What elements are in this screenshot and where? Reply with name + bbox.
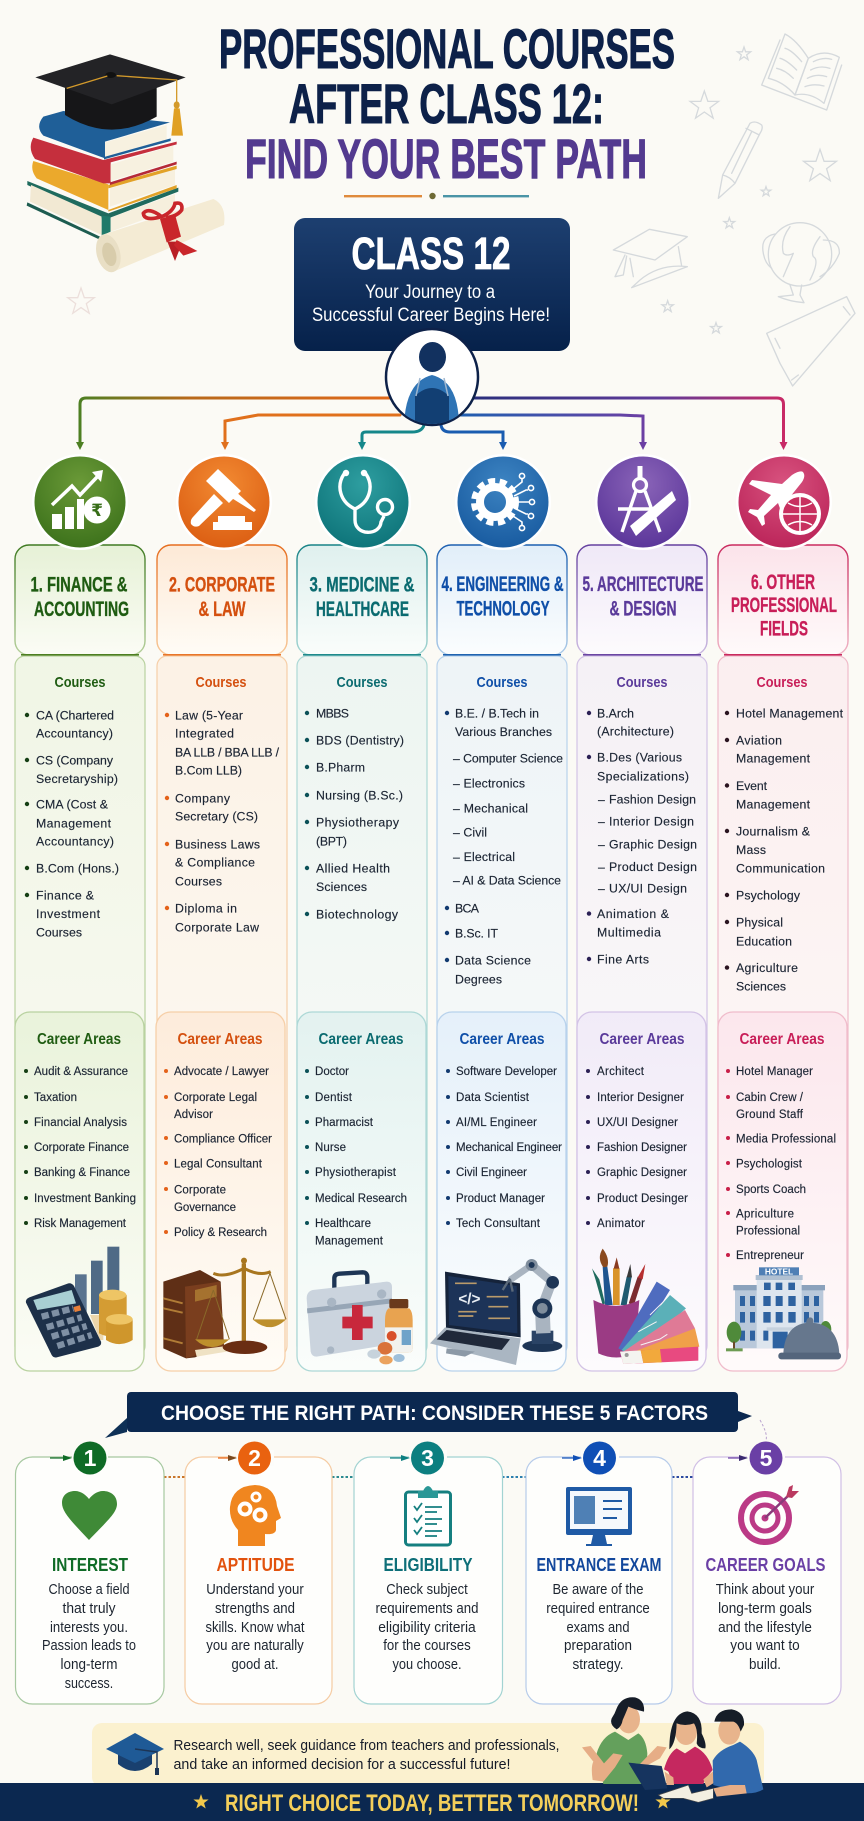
courses panel: Courses	[616, 674, 668, 691]
factor text: interests you.	[50, 1619, 128, 1636]
courses panel: Courses	[476, 674, 528, 691]
factor text: Understand your	[206, 1581, 304, 1598]
courses panel: – Civil	[453, 826, 487, 840]
advice text: Research well, seek guidance from teachers and professionals,	[174, 1737, 560, 1754]
courses panel: Multimedia	[597, 926, 661, 940]
career areas panel	[718, 1012, 847, 1371]
courses panel: Fine Arts	[597, 952, 649, 966]
number badge	[390, 1442, 447, 1474]
panel: class 12 box: Successful Career Begins Here!	[312, 305, 550, 326]
book: red	[31, 138, 177, 185]
header card: & DESIGN	[610, 598, 676, 620]
courses panel	[157, 656, 287, 1356]
courses panel: Accountancy)	[36, 834, 114, 848]
career areas panel: Hotel Manager	[736, 1066, 813, 1078]
advice text: and take an informed decision for a successful future!	[174, 1756, 510, 1773]
courses panel: Agriculture	[736, 961, 798, 975]
panel: column 2 corporate and law	[156, 454, 287, 1371]
courses panel: BCA	[455, 902, 480, 916]
career areas panel: Risk Management	[34, 1218, 127, 1230]
courses panel: Journalism &	[736, 824, 811, 838]
factor text: long-term goals	[718, 1600, 812, 1617]
career areas panel: Corporate	[174, 1184, 226, 1196]
factor text: skills. Know what	[206, 1619, 305, 1636]
courses panel: Secretaryship)	[36, 772, 118, 786]
footer band	[0, 1783, 864, 1821]
courses panel: B.Des (Various	[597, 750, 682, 764]
globe doodle	[763, 223, 839, 303]
courses panel: BA LLB / BBA LLB /	[175, 746, 280, 760]
courses panel: CMA (Cost &	[36, 798, 109, 812]
number badge: 2	[248, 1445, 261, 1471]
courses panel: – Mechanical	[453, 802, 528, 816]
courses panel: MBBS	[316, 706, 349, 720]
courses panel: Degrees	[455, 972, 502, 986]
courses panel: Investment	[36, 907, 101, 921]
panel: factor 3 eligibility	[354, 1442, 502, 1704]
left star doodle	[68, 288, 94, 313]
factor text: preparation	[564, 1637, 632, 1654]
courses panel: Integrated	[175, 726, 234, 740]
title: FIND YOUR BEST PATH	[245, 127, 647, 190]
career areas panel	[437, 1012, 566, 1371]
career areas panel: Ground Staff	[736, 1109, 804, 1121]
courses panel: Various Branches	[455, 725, 552, 739]
courses panel: Sciences	[736, 980, 786, 994]
book: blue	[39, 111, 171, 159]
courses panel: Mass	[736, 843, 766, 857]
heading banner: five factors	[105, 1392, 752, 1438]
factor text: Check subject	[386, 1581, 468, 1598]
icon: gavel	[176, 454, 272, 550]
cap	[35, 54, 186, 136]
career areas panel: Civil Engineer	[456, 1167, 527, 1179]
courses panel: – Computer Science	[453, 752, 563, 766]
header card: 5. ARCHITECTURE	[582, 573, 704, 596]
career areas panel: Nurse	[315, 1142, 346, 1154]
number badge: 5	[760, 1445, 773, 1471]
career areas panel: Corporate Finance	[34, 1142, 129, 1154]
factor text	[546, 1581, 650, 1673]
header card: ACCOUNTING	[34, 598, 129, 621]
courses panel: Education	[736, 934, 792, 948]
career areas panel: Taxation	[34, 1092, 77, 1104]
courses panel: Management	[36, 816, 112, 830]
career areas panel: Product Manager	[456, 1193, 545, 1205]
career areas panel: Software Developer	[456, 1066, 557, 1078]
factor text: that truly	[62, 1600, 116, 1617]
factor title: ELIGIBILITY	[384, 1555, 472, 1575]
icon: head with gears	[230, 1485, 281, 1546]
illustration: graduation cap, book stack and diploma	[27, 54, 224, 275]
factor text	[716, 1581, 814, 1673]
factor text: strategy.	[572, 1656, 624, 1673]
factor text: you choose.	[392, 1656, 462, 1673]
career areas panel: Policy & Research	[174, 1227, 267, 1239]
factor text	[376, 1581, 478, 1673]
panel: class 12 box: CLASS 12	[352, 228, 510, 279]
number badge	[728, 1442, 785, 1474]
career areas panel: Investment Banking	[34, 1193, 136, 1205]
courses panel: B.Com (Hons.)	[36, 862, 119, 876]
courses panel: Graphic Design	[609, 838, 697, 852]
illustration: hotel and service bell	[726, 1266, 841, 1359]
courses panel: Management	[736, 798, 811, 812]
heading banner: five factors: CHOOSE THE RIGHT PATH: CONSIDER THESE 5 FACTORS	[161, 1402, 708, 1425]
header card	[718, 545, 848, 656]
career areas panel	[15, 1012, 144, 1371]
icon: student with backpack	[386, 329, 478, 430]
courses panel: B.Com LLB)	[175, 764, 242, 778]
courses panel: Hotel Management	[736, 706, 844, 720]
panel: factor 4 entrance exam	[526, 1442, 672, 1704]
career areas panel	[577, 1012, 706, 1371]
career areas panel	[297, 1012, 426, 1371]
header card	[15, 545, 145, 656]
header card: FIELDS	[760, 618, 808, 640]
career areas panel: Physiotherapist	[315, 1167, 397, 1179]
career areas panel: Dentist	[315, 1092, 353, 1104]
factor text: Choose a field	[48, 1581, 130, 1598]
icon: gear and circuit	[455, 454, 551, 550]
illustration: law book and scales	[163, 1258, 286, 1358]
courses panel: Data Science	[455, 954, 531, 968]
career areas panel: Tech Consultant	[456, 1218, 541, 1230]
book: green bottom	[27, 181, 178, 239]
factor text: exams and	[566, 1619, 630, 1636]
illustration: calculator, coins and bars	[26, 1247, 133, 1357]
courses panel: Biotechnology	[316, 908, 399, 922]
courses panel	[437, 656, 567, 1356]
courses panel	[577, 656, 707, 1356]
panel: factor 1 interest	[16, 1442, 164, 1704]
diploma scroll	[92, 199, 224, 275]
panel: class 12 box: Your Journey to a	[365, 282, 495, 303]
factor text: good at.	[232, 1656, 278, 1673]
connector lines from student to fields	[80, 398, 784, 445]
header card: 4. ENGINEERING &	[442, 573, 564, 596]
icon: heart	[62, 1491, 117, 1540]
icon: finance growth: ₹	[91, 501, 103, 520]
career areas panel: Management	[315, 1236, 384, 1248]
career areas panel: Animator	[597, 1218, 645, 1230]
graduation cap doodle	[613, 229, 687, 288]
advice text	[174, 1737, 560, 1773]
courses panel: Secretary (CS)	[175, 810, 258, 824]
courses panel: Accountancy)	[36, 726, 113, 740]
courses panel: Interior Design	[609, 814, 694, 828]
open book doodle	[762, 34, 842, 110]
illustration: first aid kit	[307, 1272, 413, 1364]
student in blue shirt	[713, 1709, 763, 1797]
courses panel: UX/UI Design	[609, 882, 687, 896]
illustration: laptop and robot arm: </>	[458, 1291, 481, 1308]
career areas panel: Graphic Designer	[597, 1167, 687, 1179]
career areas panel: Entrepreneur	[736, 1250, 804, 1262]
courses panel: BDS (Dentistry)	[316, 734, 404, 748]
courses panel: B.Pharm	[316, 760, 365, 774]
courses panel: Courses	[196, 674, 246, 691]
career areas panel: Fashion Designer	[597, 1142, 687, 1154]
factor text: you want to	[730, 1637, 800, 1654]
courses panel: Business Laws	[175, 838, 260, 852]
career areas panel: Mechanical Engineer	[456, 1142, 562, 1154]
icon: clipboard checklist	[406, 1486, 450, 1545]
icon: plane and globe	[736, 454, 832, 550]
number badge	[218, 1442, 274, 1474]
icon: compass and ruler	[595, 454, 691, 550]
courses panel: Allied Health	[316, 862, 390, 876]
courses panel: CS (Company	[36, 754, 114, 768]
courses panel	[15, 656, 145, 1356]
header card: & LAW	[198, 598, 246, 621]
title divider	[344, 193, 529, 199]
panel: column 4 engineering and technology	[430, 454, 567, 1371]
courses panel: Finance &	[36, 888, 95, 902]
header card: 1. FINANCE &	[30, 574, 128, 596]
student in green shirt	[582, 1697, 667, 1784]
dotted links between factor cards	[164, 1420, 766, 1477]
career areas panel: Medical Research	[315, 1193, 407, 1205]
title: AFTER CLASS 12:	[289, 72, 604, 135]
factor title: ENTRANCE EXAM	[536, 1555, 662, 1575]
career areas panel: Media Professional	[736, 1134, 836, 1146]
courses panel: Law (5-Year	[175, 708, 243, 722]
number badge: 1	[84, 1445, 97, 1471]
career areas panel: Compliance Officer	[174, 1134, 272, 1146]
courses panel: Physiotherapy	[316, 816, 400, 830]
courses panel: Event	[736, 779, 768, 793]
factor text: long-term	[60, 1656, 118, 1673]
header card	[577, 545, 707, 656]
header card: TECHNOLOGY	[456, 598, 550, 620]
icon: computer exam screen	[566, 1487, 632, 1546]
courses panel: CA (Chartered	[36, 708, 114, 722]
courses panel: Nursing (B.Sc.)	[316, 788, 403, 802]
courses panel: Communication	[736, 862, 825, 876]
dark book	[628, 1763, 667, 1790]
student in pink shirt	[664, 1711, 716, 1787]
factor text	[206, 1581, 305, 1673]
panel: column 1 finance and accounting	[15, 454, 145, 1371]
illustration: brushes and colour swatches	[592, 1249, 699, 1364]
career areas panel: Career Areas	[460, 1031, 545, 1048]
footer band: RIGHT CHOICE TODAY, BETTER TOMORROW!	[225, 1790, 639, 1817]
panel: factor 2 aptitude	[185, 1442, 332, 1704]
career areas panel: Data Scientist	[456, 1092, 530, 1104]
icon: stethoscope	[315, 454, 411, 550]
career areas panel: AI/ML Engineer	[456, 1117, 537, 1129]
star	[193, 1794, 209, 1808]
pencil doodle	[718, 122, 762, 198]
courses panel: Fashion Design	[609, 792, 696, 806]
factor text: you are naturally	[206, 1637, 304, 1654]
courses panel: –	[598, 838, 605, 852]
courses panel: Courses	[175, 874, 222, 888]
factor text: for the courses	[383, 1637, 471, 1654]
book: yellow	[32, 161, 177, 212]
icon: blue graduation cap	[106, 1733, 164, 1775]
career areas panel	[156, 1012, 285, 1371]
factor text: build.	[749, 1656, 781, 1673]
header card	[437, 545, 567, 656]
panel: class 12 box	[294, 218, 570, 351]
icon: target with arrow	[741, 1485, 799, 1542]
courses panel: Management	[736, 752, 811, 766]
career areas panel: Architect	[597, 1066, 645, 1078]
courses panel: Sciences	[316, 880, 367, 894]
courses panel: (BPT)	[316, 834, 347, 848]
factor title: CAREER GOALS	[706, 1555, 826, 1575]
number badge: 3	[421, 1445, 434, 1471]
factor title: INTEREST	[52, 1555, 128, 1575]
career areas panel: Banking & Finance	[34, 1167, 130, 1179]
career areas panel: Product Desinger	[597, 1193, 688, 1205]
career areas panel: Advocate / Lawyer	[174, 1066, 269, 1078]
courses panel: Courses	[54, 674, 106, 691]
courses panel: Specializations)	[597, 770, 689, 784]
career areas panel: Pharmacist	[315, 1117, 374, 1129]
factor text: requirements and	[376, 1600, 478, 1617]
courses panel: –	[598, 860, 605, 874]
number badge	[562, 1442, 619, 1474]
career areas panel: Governance	[174, 1202, 236, 1214]
factor text: Passion leads to	[42, 1637, 136, 1654]
panel: column 6 other professional fields	[718, 454, 848, 1371]
courses panel	[297, 656, 427, 1356]
header card	[297, 545, 427, 656]
courses panel: & Compliance	[175, 856, 255, 870]
factor text: and the lifestyle	[718, 1619, 812, 1636]
career areas panel: Sports Coach	[736, 1184, 806, 1196]
courses panel: Aviation	[736, 734, 782, 748]
panel: column 5 architecture and design	[577, 454, 707, 1371]
courses panel: –	[598, 792, 605, 806]
header card: 6. OTHER	[751, 571, 815, 594]
career areas panel: Interior Designer	[597, 1092, 684, 1104]
paper doodle	[767, 297, 855, 386]
star doodles	[662, 47, 836, 333]
career areas panel: Career Areas	[318, 1031, 404, 1048]
factor text	[42, 1581, 136, 1692]
factor text: success.	[65, 1675, 113, 1692]
illustration: hotel and service bell: HOTEL	[765, 1266, 793, 1276]
factor text: strengths and	[215, 1600, 295, 1617]
courses panel: Physical	[736, 916, 783, 930]
star	[655, 1794, 671, 1808]
courses panel: –	[598, 882, 605, 896]
callout: advice banner	[92, 1723, 764, 1787]
courses panel: Psychology	[736, 888, 801, 902]
courses panel: B.E. / B.Tech in	[455, 706, 539, 720]
career areas panel: Advisor	[174, 1109, 213, 1121]
number badge	[50, 1442, 108, 1474]
courses panel: Animation &	[597, 907, 670, 921]
number badge: 4	[593, 1445, 606, 1471]
courses panel: Corporate Law	[175, 920, 259, 934]
courses panel: Courses	[336, 674, 388, 691]
open book	[658, 1785, 713, 1802]
courses panel: Company	[175, 792, 231, 806]
courses panel: Courses	[756, 674, 808, 691]
courses panel: –	[598, 814, 605, 828]
header card	[157, 545, 287, 656]
courses panel: (Architecture)	[597, 724, 674, 738]
factor title: APTITUDE	[216, 1555, 294, 1575]
career areas panel: UX/UI Designer	[597, 1117, 678, 1129]
icon: finance growth	[32, 454, 128, 550]
panel: column 3 medicine and healthcare	[297, 454, 427, 1371]
factor text: Think about your	[716, 1581, 814, 1598]
career areas panel: Career Areas	[740, 1031, 825, 1048]
connector arrow tips	[76, 442, 788, 450]
courses panel: Diploma in	[175, 902, 237, 916]
header card: 3. MEDICINE &	[310, 574, 414, 596]
courses panel: – Electrical	[453, 850, 515, 864]
courses panel: – AI & Data Science	[453, 874, 561, 888]
career areas panel: Career Areas	[600, 1031, 685, 1048]
career areas panel: Doctor	[315, 1066, 349, 1078]
factor text: Be aware of the	[552, 1581, 644, 1598]
courses panel	[718, 656, 848, 1356]
career areas panel: Professional	[736, 1226, 800, 1238]
illustration: three students with a book	[582, 1697, 763, 1802]
courses panel: B.Sc. IT	[455, 926, 498, 940]
career areas panel: Corporate Legal	[174, 1092, 257, 1104]
courses panel: B.Arch	[597, 706, 634, 720]
career areas panel: Cabin Crew /	[736, 1092, 804, 1104]
career areas panel: Financial Analysis	[34, 1117, 127, 1129]
career areas panel: Career Areas	[178, 1031, 263, 1048]
career areas panel: Psychologist	[736, 1158, 803, 1170]
courses panel: Product Design	[609, 860, 697, 874]
career areas panel: Legal Consultant	[174, 1158, 263, 1170]
panel: factor 5 career goals	[693, 1442, 841, 1704]
header card: 2. CORPORATE	[169, 574, 275, 596]
career areas panel: Career Areas	[37, 1031, 121, 1048]
illustration: laptop and robot arm	[430, 1259, 562, 1365]
header card: HEALTHCARE	[316, 598, 409, 621]
factor text: required entrance	[546, 1600, 650, 1617]
career areas panel: Healthcare	[315, 1218, 371, 1230]
title	[219, 17, 675, 190]
courses panel: – Electronics	[453, 776, 525, 790]
career areas panel: Audit & Assurance	[34, 1066, 128, 1078]
courses panel: Courses	[36, 926, 82, 940]
factor text: eligibility criteria	[378, 1619, 476, 1636]
decorative doodles	[613, 34, 855, 386]
career areas panel: Apriculture	[736, 1208, 794, 1220]
